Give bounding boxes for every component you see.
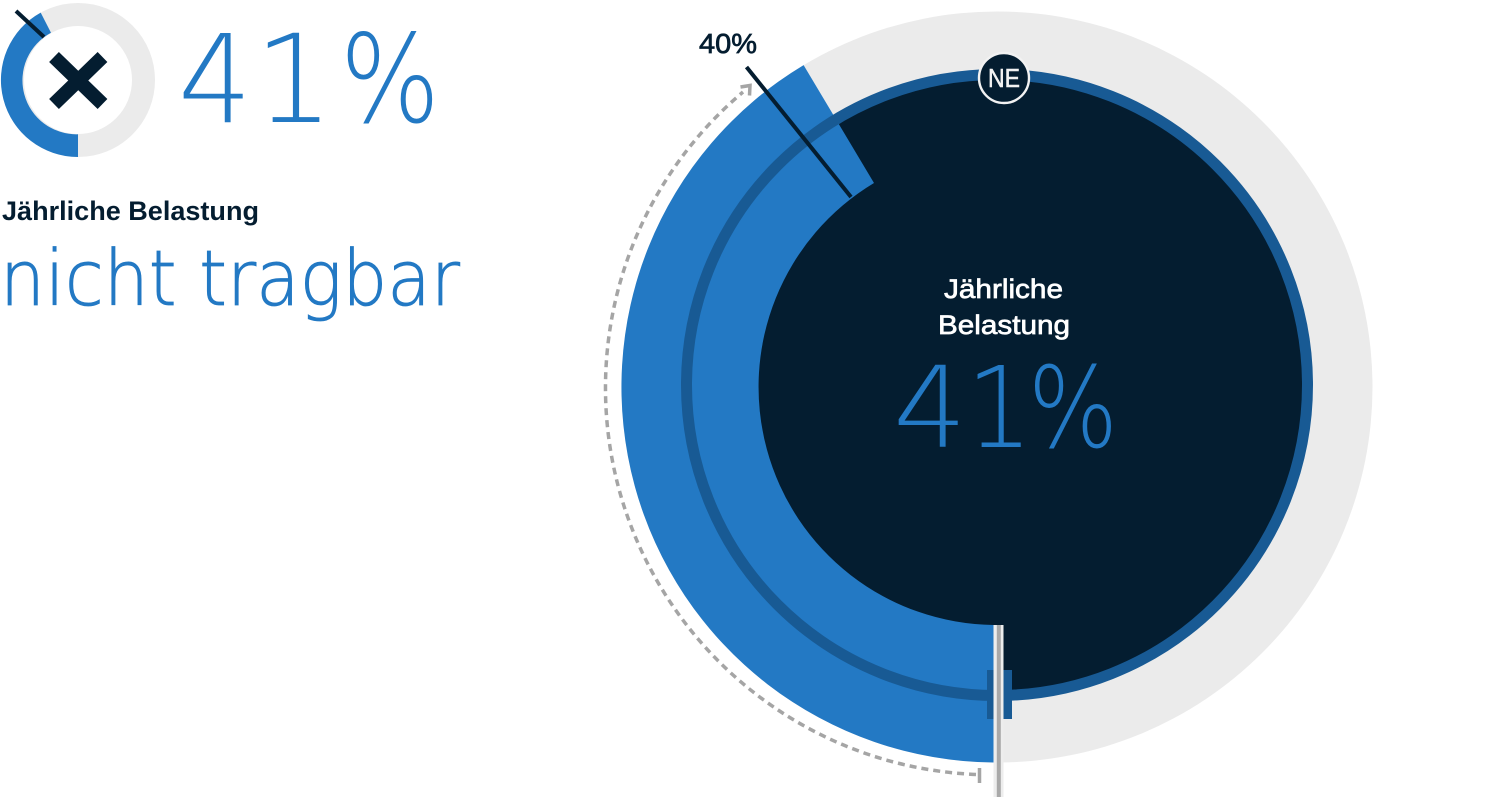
big percentage value	[178, 9, 440, 151]
callout line for 40 percent	[746, 67, 851, 197]
centre percentage value: %	[1028, 344, 1118, 474]
badge: NE: NE	[988, 63, 1020, 93]
gauge background ring	[622, 12, 1372, 762]
threshold tick	[987, 670, 1012, 719]
centre label: Belastung	[938, 310, 1070, 340]
threshold ring	[686, 74, 1308, 696]
big percentage value: %	[340, 9, 440, 151]
icon: small donut gauge with cross	[1, 11, 143, 157]
navy centre disc	[691, 79, 1303, 691]
centre percentage value	[893, 344, 1118, 474]
callout label 40 percent: 40%	[699, 28, 757, 59]
left summary panel	[0, 9, 460, 324]
centre label: Jährliche	[944, 274, 1063, 304]
centre label	[938, 274, 1070, 340]
zero marker line	[994, 625, 1004, 797]
big percentage value: 4	[178, 9, 252, 151]
dashed arrow arc	[605, 86, 980, 783]
centre percentage value: 1	[966, 344, 1033, 474]
centre percentage value: 4	[893, 344, 967, 474]
blue value wedge 41 percent	[621, 65, 994, 762]
badge: NE	[979, 53, 1029, 103]
big percentage value: 1	[254, 9, 334, 151]
verdict: not sustainable: nicht tragbar	[0, 235, 460, 324]
large radial gauge	[605, 12, 1372, 797]
label: annual burden: Jährliche Belastung	[2, 196, 259, 226]
